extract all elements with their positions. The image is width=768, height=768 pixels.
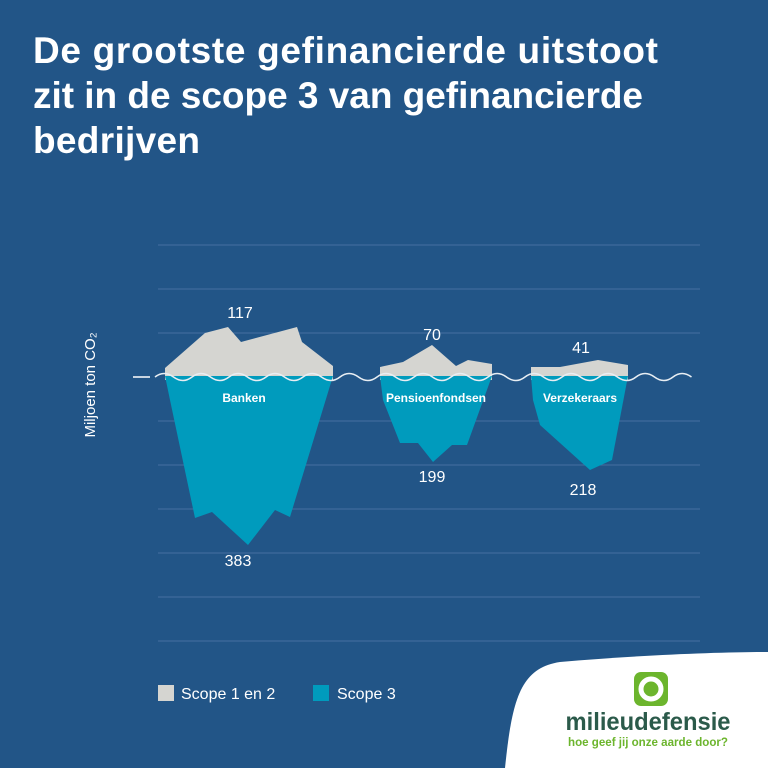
legend: Scope 1 en 2 [181, 686, 275, 703]
iceberg: Verzekeraars: 218 [570, 482, 596, 499]
title: bedrijven [33, 120, 200, 161]
axis label: Miljoen ton CO₂ [82, 332, 99, 438]
iceberg: Pensioenfondsen: 70 [423, 327, 441, 344]
legend: Scope 3 [337, 686, 396, 703]
logo panel: hoe geef jij onze aarde door? [568, 735, 728, 749]
logo panel: milieudefensie [566, 708, 731, 736]
iceberg: Pensioenfondsen [380, 327, 492, 486]
iceberg: Verzekeraars: Verzekeraars [543, 391, 617, 405]
title [33, 30, 658, 161]
legend [158, 685, 396, 703]
waves [155, 374, 692, 380]
iceberg: Banken: 383 [225, 553, 251, 570]
iceberg: Banken [165, 305, 333, 570]
iceberg: Verzekeraars: 41 [572, 340, 590, 357]
title: De grootste gefinancierde uitstoot [33, 30, 658, 71]
iceberg: Pensioenfondsen: 199 [419, 469, 445, 486]
iceberg: Verzekeraars [531, 340, 628, 499]
iceberg: Banken: 117 [227, 305, 253, 322]
iceberg: Banken: Banken [222, 391, 266, 405]
logo panel [505, 652, 768, 768]
title: zit in de scope 3 van gefinancierde [33, 75, 643, 116]
iceberg: Pensioenfondsen: Pensioenfondsen [386, 391, 486, 405]
